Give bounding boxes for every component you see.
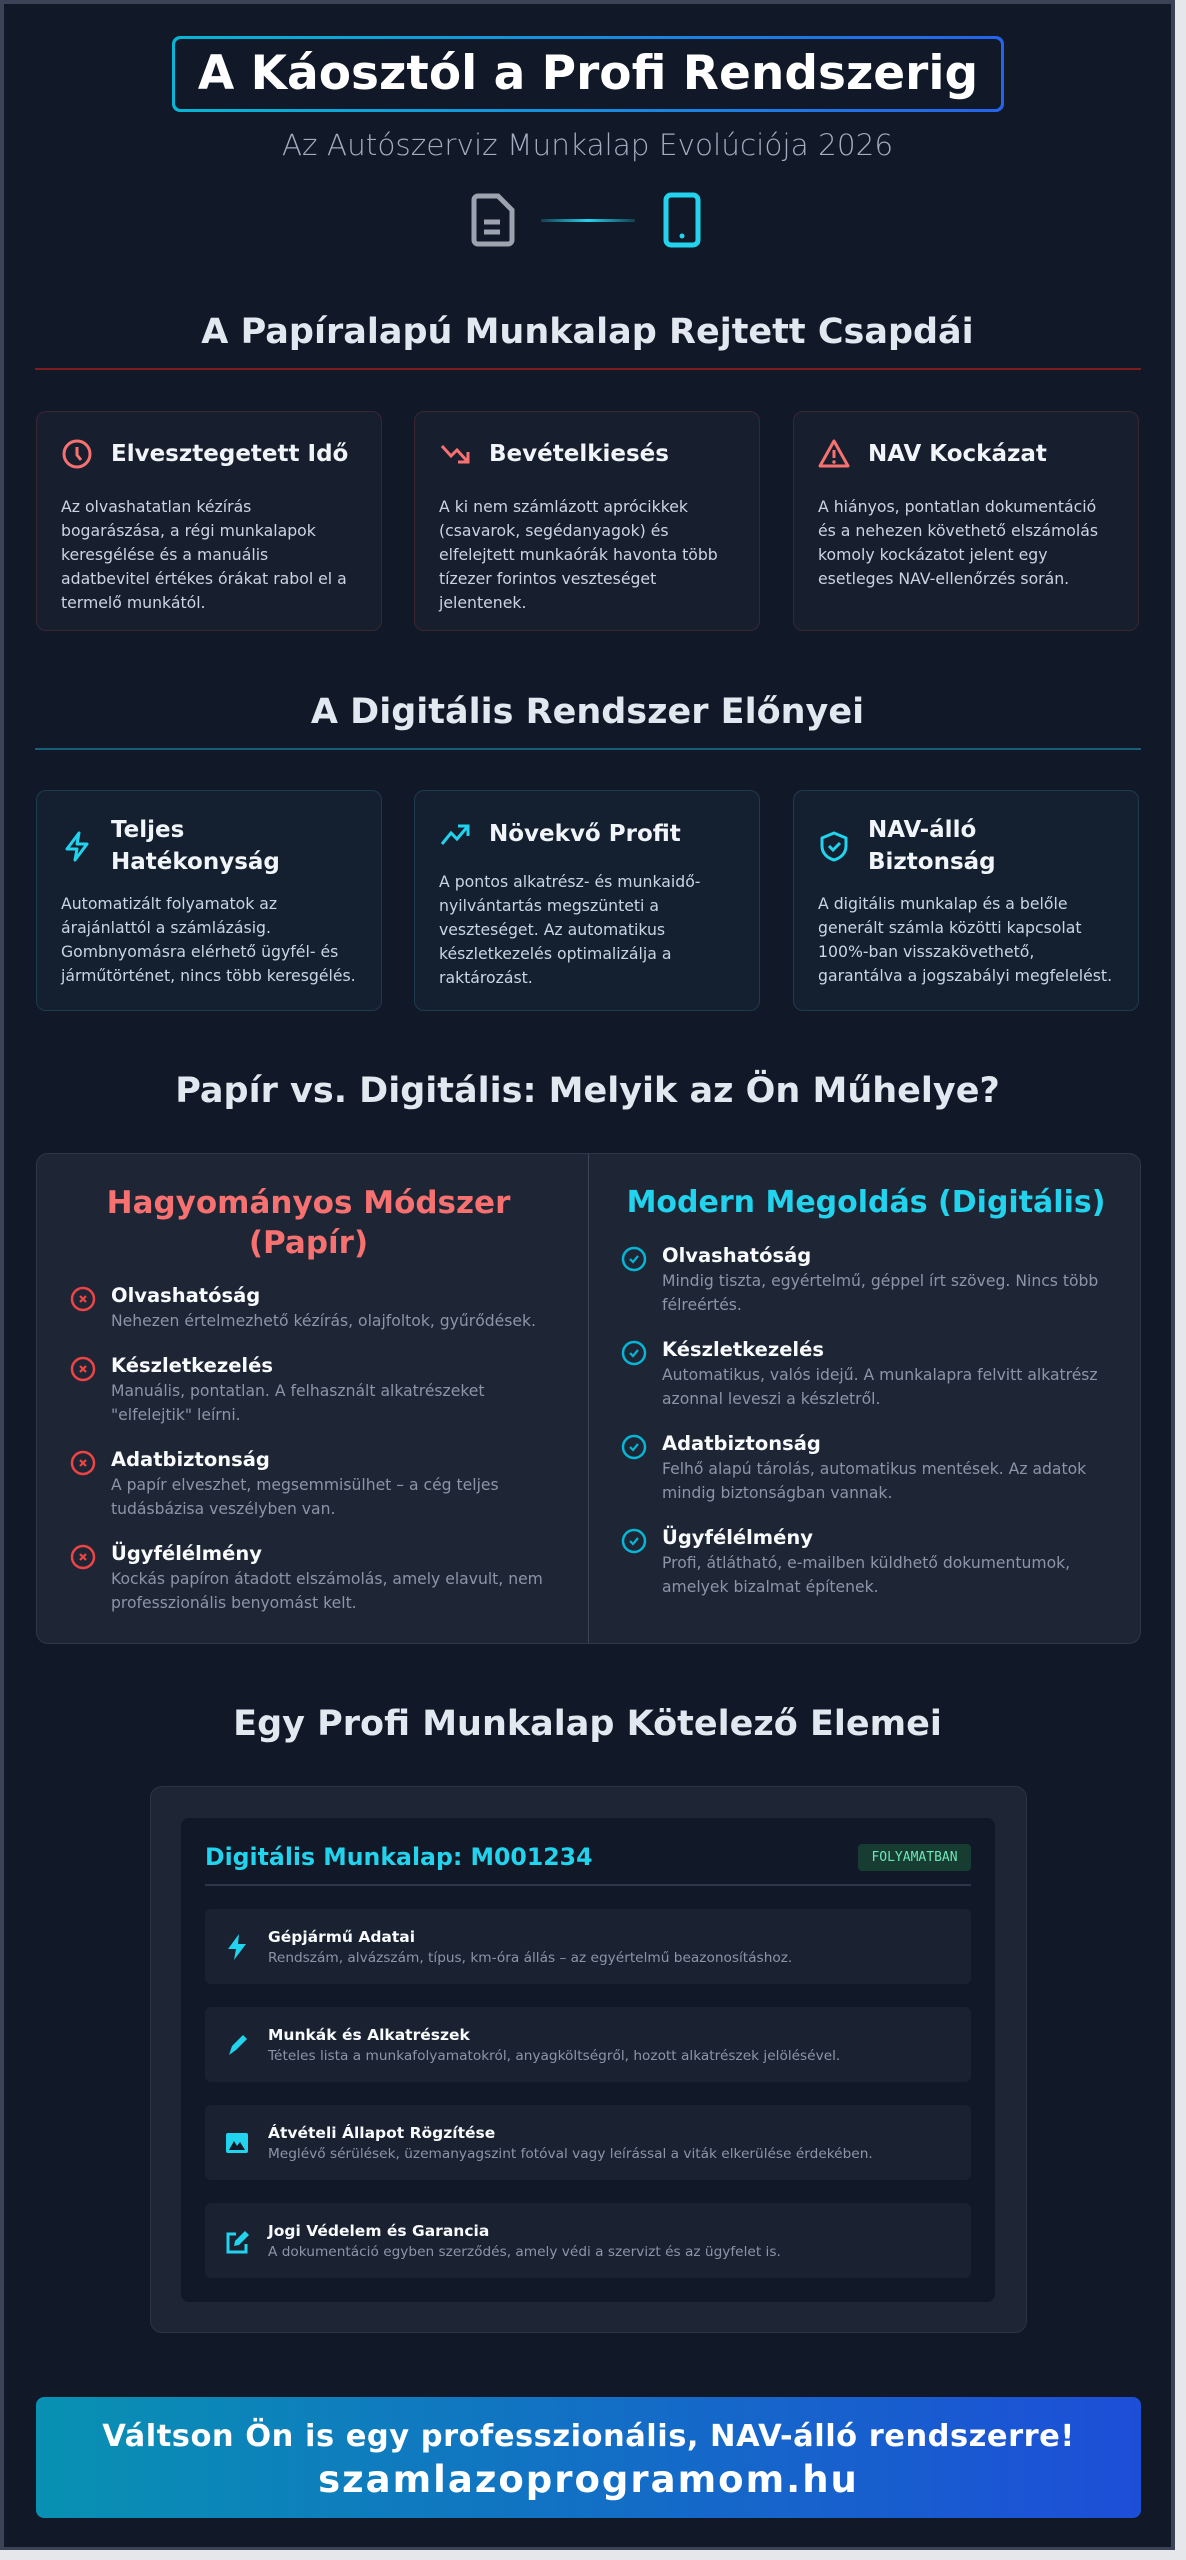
panel: comparison — [36, 1153, 1141, 1644]
card: revenue loss: Bevételkiesés — [489, 441, 669, 467]
row: vehicle data: Rendszám, alvázszám, típus, km-óra állás – az egyértelmű beazonosításhoz. — [268, 1950, 792, 1966]
column: traditional — [70, 1185, 543, 1612]
item: data security good — [622, 1432, 1086, 1502]
item: customer good: Profi, átlátható, e-mailben küldhető dokumentumok, amelyek bizalmat építenek. — [662, 1554, 1070, 1596]
item: data security good: Adatbiztonság — [662, 1432, 821, 1455]
row: legal protection: A dokumentáció egyben szerződés, amely védi a szervizt és az ügyfelet is. — [268, 2244, 781, 2260]
column: modern — [622, 1185, 1105, 1596]
inner sheet — [181, 1818, 995, 2302]
card: lost time — [36, 411, 382, 631]
item: readability good: Mindig tiszta, egyértelmű, géppel írt szöveg. Nincs több félreértés. — [662, 1272, 1098, 1314]
column: modern: Modern Megoldás (Digitális) — [627, 1185, 1105, 1220]
card: NAV security — [793, 790, 1139, 1011]
row: vehicle data — [205, 1909, 971, 1984]
card: profit — [414, 790, 760, 1011]
item: customer good — [622, 1526, 1070, 1596]
card: revenue loss — [414, 411, 760, 631]
CTA banner: Váltson Ön is egy professzionális, NAV-álló rendszerre! — [102, 2419, 1075, 2454]
item: data security bad: A papír elveszhet, megsemmisülhet – a cég teljes tudásbázisa veszélyben van. — [111, 1476, 499, 1518]
subtitle: Az Autószerviz Munkalap Evolúciója 2026 — [282, 128, 893, 162]
card: revenue loss: A ki nem számlázott aprócikkek (csavarok, segédanyagok) és elfelejtett munkaórák havonta több tízezer forintos veszteséget jelentenek. — [439, 497, 718, 612]
card: NAV risk — [793, 411, 1139, 631]
item: readability bad — [70, 1284, 536, 1330]
card: profit: A pontos alkatrész- és munkaidő-nyilvántartás megszünteti a veszteséget. Az automatikus készletkezelés optimalizálja a raktározást. — [439, 872, 700, 987]
badge: FOLYAMATBAN — [871, 1850, 958, 1865]
badge — [858, 1844, 971, 1871]
row: legal protection — [205, 2203, 971, 2278]
heading: paper traps: A Papíralapú Munkalap Rejtett Csapdái — [201, 312, 974, 352]
heading: required elements: Egy Profi Munkalap Kötelező Elemei — [233, 1704, 942, 1744]
sheet header — [205, 1840, 971, 1886]
item: data security bad — [70, 1448, 499, 1518]
heading: comparison: Papír vs. Digitális: Melyik az Ön Műhelye? — [175, 1071, 1000, 1111]
item: readability bad: Olvashatóság — [111, 1284, 260, 1307]
card: NAV security: A digitális munkalap és a belőle generált számla közötti kapcsolat 100%-ban visszakövethető, garantálva a jogszabályi megfelelést. — [818, 894, 1112, 985]
title — [172, 36, 1004, 112]
CTA banner — [36, 2397, 1141, 2518]
card: efficiency: Automatizált folyamatok az árajánlattól a számlázásig. Gombnyomásra elérhető ügyfél- és járműtörténet, nincs több keresgélés. — [61, 894, 356, 985]
card: NAV security: NAV-álló Biztonság — [868, 817, 996, 875]
item: stock bad — [70, 1354, 485, 1424]
item: stock bad: Manuális, pontatlan. A felhasznált alkatrészeket "elfelejtik" leírni. — [111, 1382, 485, 1424]
item: stock good: Készletkezelés — [662, 1338, 824, 1361]
icon: paper to phone — [472, 192, 700, 248]
card: NAV risk: NAV Kockázat — [868, 441, 1047, 467]
item: readability good: Olvashatóság — [662, 1244, 811, 1267]
title: A Káosztól a Profi Rendszerig — [198, 46, 978, 101]
card: efficiency — [36, 790, 382, 1011]
card: profit: Növekvő Profit — [489, 821, 681, 847]
card: lost time: Elvesztegetett Idő — [111, 441, 348, 467]
CTA banner: szamlazoprogramom.hu — [318, 2458, 859, 2501]
row: intake condition — [205, 2105, 971, 2180]
sheet header: Digitális Munkalap: M001234 — [205, 1843, 592, 1871]
item: customer bad — [70, 1542, 543, 1612]
row: works and parts: Tételes lista a munkafolyamatokról, anyagköltségről, hozott alkatrészek jelölésével. — [268, 2048, 840, 2064]
card: NAV risk: A hiányos, pontatlan dokumentáció és a nehezen követhető elszámolás komoly kockázatot jelent egy esetleges NAV-ellenőrzés során. — [818, 497, 1098, 588]
row: intake condition: Átvételi Állapot Rögzítése — [268, 2124, 495, 2142]
heading: digital benefits: A Digitális Rendszer Előnyei — [311, 692, 864, 732]
card: lost time: Az olvashatatlan kézírás bogarászása, a régi munkalapok keresgélése és a manuális adatbevitel értékes órákat rabol el a termelő munkától. — [61, 497, 347, 612]
item: readability bad: Nehezen értelmezhető kézírás, olajfoltok, gyűrődések. — [111, 1312, 536, 1330]
card: efficiency: Teljes Hatékonyság — [111, 817, 280, 875]
row: intake condition: Meglévő sérülések, üzemanyagszint fotóval vagy leírással a viták elkerülése érdekében. — [268, 2146, 873, 2162]
item: customer good: Ügyfélélmény — [662, 1526, 813, 1549]
item: customer bad: Ügyfélélmény — [111, 1542, 262, 1565]
item: stock good — [622, 1338, 1098, 1408]
row: works and parts — [205, 2007, 971, 2082]
column: traditional: Hagyományos Módszer (Papír) — [107, 1185, 510, 1261]
item: readability good — [622, 1244, 1098, 1314]
panel: digital worksheet mockup — [150, 1786, 1027, 2333]
item: customer bad: Kockás papíron átadott elszámolás, amely elavult, nem professzionális benyomást kelt. — [111, 1570, 543, 1612]
row: vehicle data: Gépjármű Adatai — [268, 1928, 415, 1946]
item: stock bad: Készletkezelés — [111, 1354, 273, 1377]
row: works and parts: Munkák és Alkatrészek — [268, 2026, 470, 2044]
item: data security good: Felhő alapú tárolás, automatikus mentések. Az adatok mindig biztonságban vannak. — [662, 1460, 1086, 1502]
row: legal protection: Jogi Védelem és Garancia — [268, 2222, 489, 2240]
item: data security bad: Adatbiztonság — [111, 1448, 270, 1471]
item: stock good: Automatikus, valós idejű. A munkalapra felvitt alkatrész azonnal leveszi a készletről. — [662, 1366, 1098, 1408]
